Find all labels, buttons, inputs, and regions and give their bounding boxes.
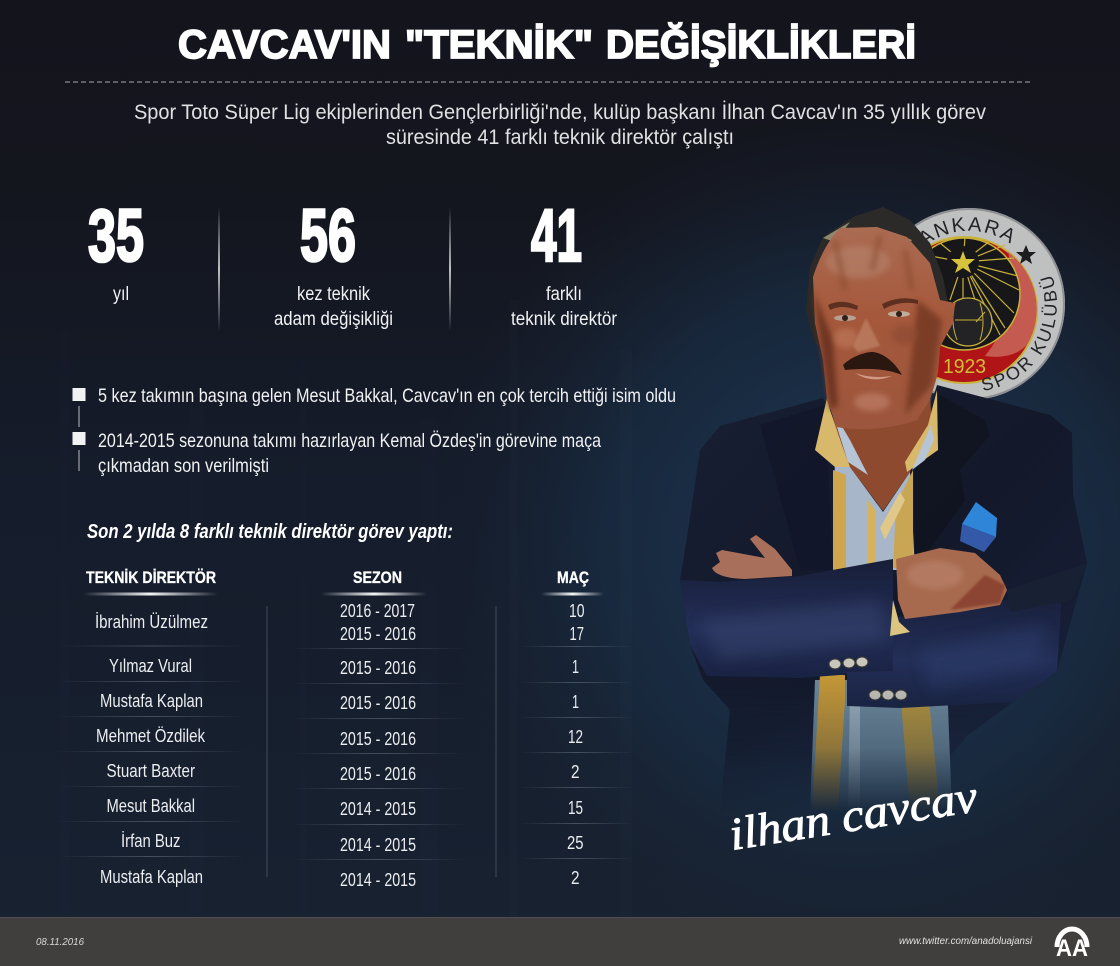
club badge: Gençlerbirliği: 1923: [943, 356, 986, 378]
hair: [806, 207, 948, 345]
subtitle: Spor Toto Süper Lig ekiplerinden Gençlerbirliği'nde, kulüp başkanı İlhan Cavcav'ın 35 yıllık görev: [134, 101, 986, 124]
table: sezon column: 2014 - 2015: [340, 835, 416, 855]
table: maç column: [567, 601, 584, 888]
bullet list: 5 kez takımın başına gelen Mesut Bakkal, Cavcav'ın en çok tercih ettiği isim oldu: [98, 385, 676, 407]
stat: 41 farklı teknik direktör: teknik direktör: [511, 309, 618, 330]
table: sezon column: 2015 - 2016: [340, 624, 416, 644]
footer twitter address: www.twitter.com/anadoluajansi: [899, 935, 1033, 947]
table: header row: MAÇ: [557, 568, 589, 587]
table: maç column: 2: [571, 868, 580, 888]
table: maç column: 12: [568, 727, 583, 747]
club badge: Gençlerbirliği: ANKARA: [921, 217, 1012, 244]
table: sezon column: 2014 - 2015: [340, 870, 416, 890]
table: teknik direktör column: Mustafa Kaplan: [100, 691, 203, 711]
footer bar: [0, 917, 1120, 966]
shirt: [810, 455, 952, 812]
bullet list: çıkmadan son verilmişti: [98, 455, 269, 477]
stat: 35 yıl: 35: [88, 194, 144, 277]
collars: [815, 390, 938, 475]
stat: 56 kez teknik adam değişikliği: kez teknik: [297, 284, 370, 305]
portrait: İlhan Cavcav: [680, 207, 1087, 812]
table: header row: [83, 568, 604, 596]
face shading: [813, 235, 942, 415]
table: sezon column: 2015 - 2016: [340, 693, 416, 713]
table: teknik direktör column: [95, 612, 208, 887]
icon: Anadolu Agency logo: AA: [1056, 935, 1088, 962]
title: "TEKNİK": [405, 23, 593, 67]
bullet list: [72, 385, 676, 477]
table: sezon column: 2015 - 2016: [340, 658, 416, 678]
table: sezon column: 2014 - 2015: [340, 799, 416, 819]
lapel shading: [760, 405, 833, 570]
signature: ilhan cavcav: ilhan cavcav: [726, 770, 981, 860]
yellow cuff: [890, 600, 910, 636]
table: sezon column: [340, 601, 416, 890]
table: header row: SEZON: [353, 568, 402, 587]
jacket body: [680, 385, 1087, 812]
table: teknik direktör column: Mesut Bakkal: [106, 796, 195, 816]
subtitle: [134, 101, 986, 149]
title: DEĞİŞİKLİKLERİ: [606, 21, 916, 67]
club badge: Gençlerbirliği: [914, 208, 1065, 398]
stat: 41 farklı teknik direktör: 41: [531, 194, 582, 277]
cuff buttons lower: [869, 690, 907, 700]
stat: 41 farklı teknik direktör: farklı: [546, 284, 582, 305]
stat: 56 kez teknik adam değişikliği: adam değişikliği: [274, 309, 393, 330]
table: maç column: 15: [568, 798, 583, 818]
table: teknik direktör column: Mehmet Özdilek: [96, 726, 206, 746]
table: maç column: 25: [567, 833, 584, 853]
table: teknik direktör column: Yılmaz Vural: [109, 656, 192, 676]
table heading: Son 2 yılda 8 farklı teknik direktör görev yaptı:: [87, 521, 453, 543]
table: maç column: 2: [571, 762, 580, 782]
left hand fingers: [712, 535, 792, 579]
face: [813, 227, 955, 429]
stat: 35 yıl: [88, 194, 144, 305]
table: sezon column: 2016 - 2017: [340, 601, 415, 621]
table: sezon column: 2015 - 2016: [340, 764, 416, 784]
table: maç column: 1: [572, 692, 579, 712]
table: maç column: 17: [570, 624, 584, 644]
table: maç column: 1: [572, 657, 579, 677]
title: [178, 21, 916, 67]
forearm hand: [896, 548, 1007, 619]
table: teknik direktör column: Stuart Baxter: [106, 761, 195, 781]
table: teknik direktör column: İbrahim Üzülmez: [95, 612, 208, 632]
stat: 35 yıl: yıl: [113, 284, 129, 305]
stat: 56 kez teknik adam değişikliği: 56: [300, 194, 356, 277]
cuff buttons upper: [829, 657, 868, 669]
stat: 41 farklı teknik direktör: [511, 194, 618, 330]
lower sleeve: [847, 590, 1062, 708]
subtitle: süresinde 41 farklı teknik direktör çalıştı: [386, 126, 734, 149]
front sleeve: [680, 559, 893, 678]
footer date: 08.11.2016: [36, 936, 84, 948]
pocket square: [960, 502, 997, 552]
table: teknik direktör column: Mustafa Kaplan: [100, 867, 203, 887]
table: teknik direktör column: İrfan Buz: [121, 831, 180, 851]
table: maç column: 10: [569, 601, 584, 621]
bullet list: 2014-2015 sezonuna takımı hazırlayan Kemal Özdeş'in görevine maça: [98, 430, 601, 452]
stat: 56 kez teknik adam değişikliği: [274, 194, 393, 330]
club badge: Gençlerbirliği: SPOR KULÜBÜ: [982, 276, 1057, 390]
table: sezon column: 2015 - 2016: [340, 729, 416, 749]
table: header row: TEKNİK DİREKTÖR: [86, 568, 216, 587]
title: CAVCAV'IN: [178, 23, 391, 67]
neck and chest: [827, 395, 932, 511]
